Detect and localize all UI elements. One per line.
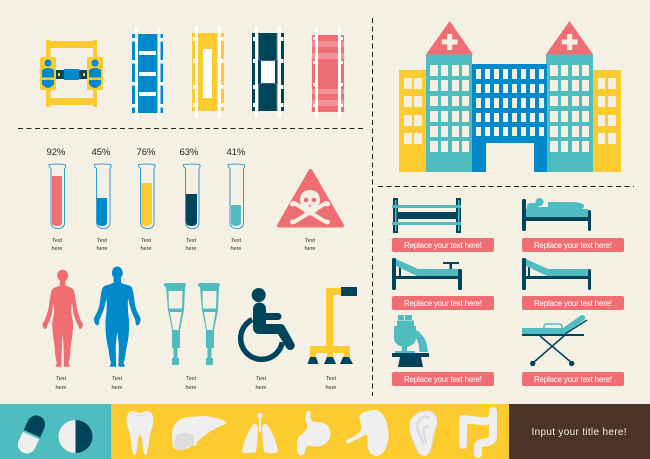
icon: adjustable bed with table (392, 258, 462, 290)
icon: pair of crutches: Text (186, 376, 197, 382)
icon: kidney (346, 410, 389, 456)
chart: test tube 92%: here (51, 246, 63, 252)
button: Replace your text here: Replace your text here! (404, 375, 482, 384)
icon: liver (172, 416, 227, 450)
icon: pink stretcher (312, 27, 344, 119)
icon: female body silhouette: here (55, 385, 67, 391)
button: Replace your text here (392, 372, 494, 386)
icon: toxic hazard triangle with skull: here (304, 246, 316, 252)
icon: flat bed top view (392, 198, 461, 233)
button: Replace your text here: Replace your text here! (534, 241, 612, 250)
chart: test tube 41%: here (230, 246, 242, 252)
chart: test tube 45% (91, 147, 111, 252)
icon: quad walking cane: Text (326, 376, 337, 382)
icon: female body silhouette (43, 270, 83, 391)
button: Replace your text here: Replace your text here! (534, 375, 612, 384)
button: Replace your text here (392, 238, 494, 252)
footer panel: organs (111, 404, 509, 459)
icon: lungs (242, 413, 278, 453)
chart: test tube 76%: here (140, 246, 152, 252)
icon: male body silhouette: Text (112, 376, 123, 382)
icon: pair of crutches: here (185, 385, 197, 391)
footer panel: title: Input your title here! (532, 427, 626, 438)
icon: microscope (392, 315, 429, 367)
chart: test tube 76% (136, 147, 156, 252)
chart: test tube 92%: Text (52, 238, 63, 244)
illustration: hospital building (399, 21, 621, 172)
chart: test tube 41%: 41% (226, 147, 246, 158)
chart: test tube 41%: Text (231, 238, 242, 244)
button: Replace your text here (522, 238, 624, 252)
icon: blue stretcher (132, 27, 163, 120)
icon: bed with patient (522, 198, 591, 231)
button: Replace your text here (392, 296, 494, 310)
icon: adjustable bed (522, 258, 591, 290)
icon: female body silhouette: Text (56, 376, 67, 382)
icon: yellow stretcher (192, 26, 224, 118)
chart: test tube 92%: 92% (46, 147, 66, 158)
chart: test tube 45%: Text (97, 238, 108, 244)
icon: quad walking cane (308, 287, 357, 391)
chart: test tube 76%: 76% (136, 147, 156, 158)
button: Replace your text here: Replace your text here! (534, 299, 612, 308)
icon: wheelchair user: Text (256, 376, 267, 382)
icon: capsule (15, 413, 48, 456)
icon: stretcher with yellow frame and blue straps (40, 40, 103, 107)
icon: tooth (126, 411, 154, 455)
icon: pair of crutches (164, 283, 220, 391)
chart: test tube 92% (46, 147, 66, 252)
chart: test tube 63% (179, 147, 200, 252)
chart: test tube 41% (226, 147, 246, 252)
icon: half-dark tablet (58, 420, 92, 453)
icon: stomach (297, 411, 330, 456)
footer panel: medicine (0, 404, 111, 459)
footer panel: title (509, 404, 650, 459)
icon: toxic hazard triangle with skull (279, 171, 342, 252)
icon: wheelchair user (241, 288, 295, 391)
chart: test tube 76%: Text (141, 238, 152, 244)
icon: ear (409, 411, 437, 456)
icon: wheelchair user: here (255, 385, 267, 391)
icon: quad walking cane: here (325, 385, 337, 391)
icon: large intestine (463, 411, 493, 454)
icon: navy stretcher (252, 26, 284, 118)
icon: male body silhouette: here (111, 385, 123, 391)
chart: test tube 45%: here (96, 246, 108, 252)
chart: test tube 63%: here (185, 246, 197, 252)
icon: toxic hazard triangle with skull: Text (305, 238, 316, 244)
button: Replace your text here: Replace your text here! (404, 241, 482, 250)
chart: test tube 63%: Text (186, 238, 197, 244)
button: Replace your text here (522, 296, 624, 310)
button: Replace your text here: Replace your text here! (404, 299, 482, 308)
icon: male body silhouette (94, 266, 141, 391)
chart: test tube 45%: 45% (91, 147, 111, 158)
icon: folding gurney (522, 315, 587, 366)
chart: test tube 63%: 63% (179, 147, 199, 158)
button: Replace your text here (522, 372, 624, 386)
